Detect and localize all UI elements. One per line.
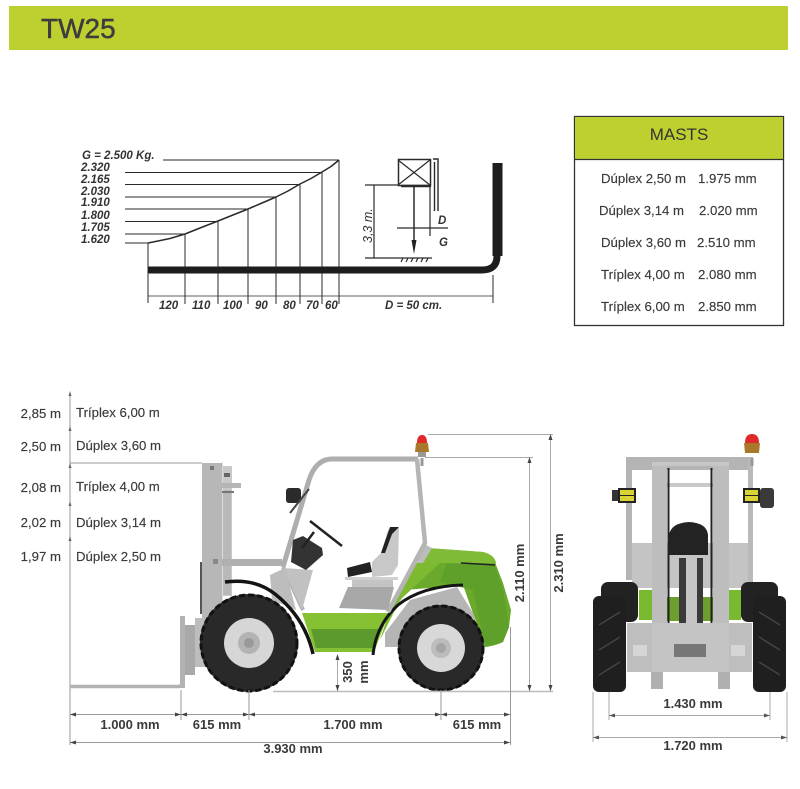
diagram labels: 80 — [283, 300, 296, 312]
mast — [200, 462, 282, 667]
front green panels — [639, 590, 741, 621]
side view dimension labels: 1.000 mm — [100, 717, 160, 732]
mast height labels: 2,08 m — [21, 480, 61, 495]
side view dimension labels: 615 mm — [193, 717, 241, 732]
diagram labels: 70 — [306, 300, 319, 312]
front fender — [225, 581, 313, 654]
front view dimension labels: 1.430 mm — [663, 696, 723, 711]
masts table — [574, 116, 784, 326]
mast columns front — [652, 462, 729, 627]
carriage plate front — [627, 623, 752, 689]
mast height labels: 2,50 m — [21, 439, 61, 454]
operator seat front — [669, 522, 708, 555]
masts table header — [574, 117, 784, 160]
side view dimension labels: 1.700 mm — [323, 717, 383, 732]
mast height labels — [21, 405, 161, 564]
title: TW25 — [41, 13, 116, 44]
masts table rows: 2.850 mm — [698, 299, 757, 314]
masts table rows: 1.975 mm — [698, 171, 757, 186]
diagram labels: D = 50 cm. — [385, 300, 442, 312]
forklift front view — [593, 434, 786, 692]
forklift side view — [70, 435, 511, 692]
masts table rows: Dúplex 2,50 m — [601, 171, 686, 186]
side view dimension labels: 3.930 mm — [263, 741, 323, 756]
front wheel — [200, 594, 298, 692]
diagram labels — [159, 208, 448, 312]
masts table rows: Tríplex 4,00 m — [601, 267, 685, 282]
header bar — [9, 6, 788, 50]
mast height labels: Dúplex 3,14 m — [76, 515, 161, 530]
load labels: 1.705 — [81, 222, 110, 234]
front view dimension labels: 1.720 mm — [663, 738, 723, 753]
side view dimension labels: 350 — [340, 661, 355, 683]
load labels: 1.800 — [81, 210, 110, 222]
rear hood — [385, 548, 511, 647]
mast height labels: Dúplex 3,60 m — [76, 438, 161, 453]
load labels: 2.320 — [80, 162, 110, 174]
diagram labels: 3,3 m. — [361, 208, 375, 243]
rear wheel — [398, 605, 484, 691]
mast height labels: 2,85 m — [21, 406, 61, 421]
masts table rows: 2.510 mm — [697, 235, 756, 250]
load labels: 1.910 — [81, 197, 110, 209]
load labels: 2.030 — [80, 186, 110, 198]
mast height scale — [21, 391, 202, 745]
steering wheel — [302, 521, 342, 548]
left tyres front — [593, 582, 638, 692]
load box diagram — [365, 159, 448, 262]
diagram labels: 60 — [325, 300, 338, 312]
masts table rows: Tríplex 6,00 m — [601, 299, 685, 314]
mast height labels: Dúplex 2,50 m — [76, 549, 161, 564]
body floor — [302, 545, 440, 652]
masts table rows: Dúplex 3,60 m — [601, 235, 686, 250]
side view dimension labels: 2.310 mm — [551, 533, 566, 593]
work lights — [612, 488, 774, 508]
mast height labels: Tríplex 4,00 m — [76, 479, 160, 494]
masts table rows: 2.020 mm — [699, 203, 758, 218]
diagram labels: 100 — [223, 300, 243, 312]
diagram labels: 110 — [192, 300, 211, 312]
fork and carriage — [70, 616, 207, 688]
diagram labels: 120 — [159, 300, 179, 312]
load labels: 2.165 — [80, 174, 110, 186]
side view dimension labels: 2.110 mm — [512, 544, 527, 602]
side view dimension labels: mm — [356, 660, 371, 684]
side view dimension labels: 615 mm — [453, 717, 501, 732]
capacity curve — [148, 160, 339, 243]
front view dimension labels — [663, 696, 723, 753]
cab frame — [283, 459, 425, 612]
diagram labels: D — [438, 215, 446, 227]
diagram labels: 90 — [255, 300, 268, 312]
beacon front — [744, 434, 760, 466]
seat — [339, 527, 399, 610]
mast height labels: 2,02 m — [21, 515, 61, 530]
right tyres front — [741, 582, 786, 692]
fork — [148, 163, 497, 270]
load labels: 1.620 — [81, 234, 110, 246]
beacon — [415, 435, 429, 466]
masts table rows: Dúplex 3,14 m — [599, 203, 684, 218]
load chart: capacity curve diagram — [80, 150, 498, 312]
masts table rows: 2.080 mm — [698, 267, 757, 282]
mirror — [286, 488, 309, 513]
load labels — [80, 150, 155, 246]
front view dimension lines — [593, 692, 787, 742]
cab frame front — [626, 457, 753, 672]
mast height labels: 1,97 m — [21, 549, 61, 564]
mast height labels: Tríplex 6,00 m — [76, 405, 160, 420]
diagram labels: G — [439, 237, 448, 249]
masts table rows — [599, 171, 758, 314]
masts table header: MASTS — [650, 125, 708, 144]
side view dimension lines — [70, 434, 553, 745]
load labels: G = 2.500 Kg. — [82, 150, 155, 162]
rear wheel arch — [373, 585, 483, 655]
side view dimension labels — [100, 533, 566, 756]
load guide lines — [125, 160, 493, 304]
dashboard console — [270, 536, 323, 610]
